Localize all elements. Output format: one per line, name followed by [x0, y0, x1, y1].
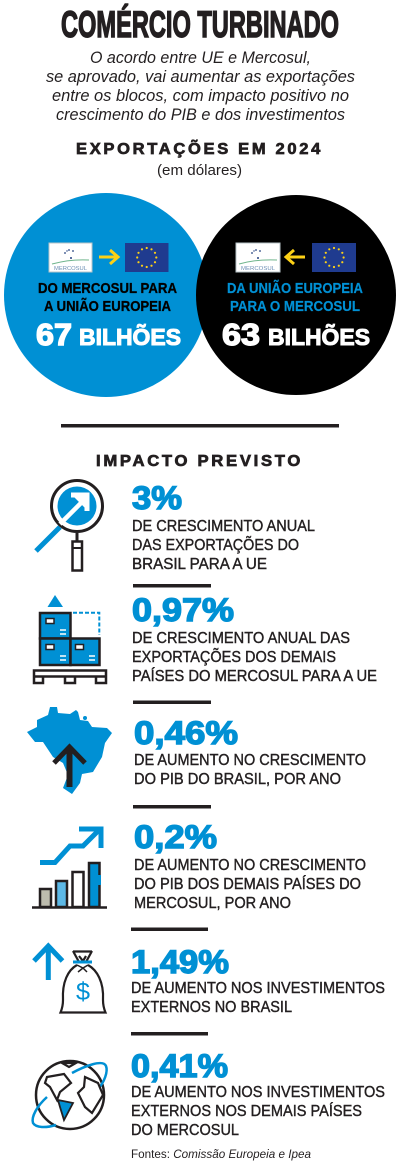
icon: Mercosul flag [49, 243, 92, 272]
icon: EU flag [312, 243, 356, 272]
intro text: se aprovado, vai aumentar as exportações [46, 67, 355, 86]
stat description [134, 752, 366, 788]
stat description: EXPORTAÇÕES DOS DEMAIS [132, 649, 336, 666]
stat description [134, 857, 366, 912]
stat description: DE AUMENTO NOS INVESTIMENTOS [131, 980, 385, 997]
label: UE para Mercosul: DA UNIÃO EUROPEIA [227, 279, 363, 297]
unit note: (em dólares) [157, 162, 242, 179]
source note: Fontes: Comissão Europeia e Ipea [131, 1147, 311, 1161]
stat description [131, 1084, 385, 1139]
stat description: DO PIB DOS DEMAIS PAÍSES DO [134, 876, 361, 893]
value: 63 bilhões: BILHÕES [268, 323, 370, 350]
stat description: DO MERCOSUL [131, 1122, 239, 1139]
stat description [131, 980, 385, 1016]
icon: money bag with arrow: $ [76, 978, 90, 1006]
value: 67 bilhões: 67 [36, 317, 72, 352]
intro text [46, 48, 355, 124]
stat description: PAÍSES DO MERCOSUL PARA A UE [132, 668, 377, 685]
label: Mercosul para UE: A UNIÃO EUROPEIA [44, 297, 171, 315]
stat value: 0,41% [131, 1048, 228, 1084]
item: 3% [36, 480, 315, 573]
item: 0,46% [27, 707, 366, 794]
heading: exportações em 2024: EXPORTAÇÕES EM 2024 [76, 140, 323, 158]
intro text: O acordo entre UE e Mercosul, [90, 48, 311, 67]
stat description: BRASIL PARA A UE [132, 556, 267, 573]
stat description: DE AUMENTO NO CRESCIMENTO [134, 752, 366, 769]
value: 67 bilhões: BILHÕES [79, 323, 181, 350]
stat value: 3% [132, 480, 182, 516]
icon: magnifying glass [36, 480, 102, 570]
stat description [132, 518, 315, 573]
intro text: crescimento do PIB e dos investimentos [56, 105, 345, 124]
stat description: DE CRESCIMENTO ANUAL DAS [132, 630, 350, 647]
value: 63 bilhões [222, 317, 370, 352]
icon: globe with ring [33, 1061, 107, 1129]
item: 0,41% [33, 1048, 385, 1139]
intro text: entre os blocos, com impacto positivo no [52, 86, 349, 105]
value: 63 bilhões: 63 [222, 317, 260, 352]
panel: Mercosul to EU circle [4, 193, 208, 397]
stat description: EXTERNOS NO BRASIL [131, 999, 292, 1016]
stat description: DO PIB DO BRASIL, POR ANO [134, 771, 341, 788]
heading: impacto previsto: IMPACTO PREVISTO [96, 453, 303, 470]
stat description: DE CRESCIMENTO ANUAL [132, 518, 315, 535]
icon: Mercosul flag: MERCOSUL [54, 266, 87, 272]
value: 67 bilhões [36, 317, 181, 352]
label: UE para Mercosul: PARA O MERCOSUL [230, 299, 360, 315]
stat description: EXTERNOS NOS DEMAIS PAÍSES [131, 1103, 362, 1120]
stat description: MERCOSUL, POR ANO [134, 895, 291, 912]
item: 0,2% [32, 819, 366, 912]
icon: Mercosul flag [236, 243, 280, 272]
stat description [132, 630, 377, 685]
icon: EU flag [125, 243, 168, 272]
label: UE para Mercosul [227, 279, 363, 315]
stat value: 0,97% [132, 592, 234, 628]
stat description: DE AUMENTO NOS INVESTIMENTOS [131, 1084, 385, 1101]
item: 1,49% [34, 944, 385, 1016]
stat value: 0,2% [134, 819, 217, 855]
stat value: 0,46% [134, 715, 238, 751]
stat description: DE AUMENTO NO CRESCIMENTO [134, 857, 366, 874]
label: Mercosul para UE: DO MERCOSUL PARA [38, 281, 177, 297]
icon: rising bar chart [32, 829, 107, 908]
item: 0,97% [34, 592, 377, 685]
icon: yellow arrow right [99, 250, 118, 264]
icon: yellow arrow left [286, 250, 305, 264]
stat description: DAS EXPORTAÇÕES DO [132, 537, 299, 554]
panel: EU to Mercosul circle [196, 195, 396, 395]
icon: Mercosul flag: MERCOSUL [241, 266, 275, 272]
label: Mercosul para UE [38, 281, 177, 315]
icon: Brazil map with arrow [27, 707, 112, 794]
stat value: 1,49% [131, 944, 229, 980]
icon: boxes on pallet [34, 595, 106, 683]
icon: money bag with arrow [34, 946, 106, 1012]
